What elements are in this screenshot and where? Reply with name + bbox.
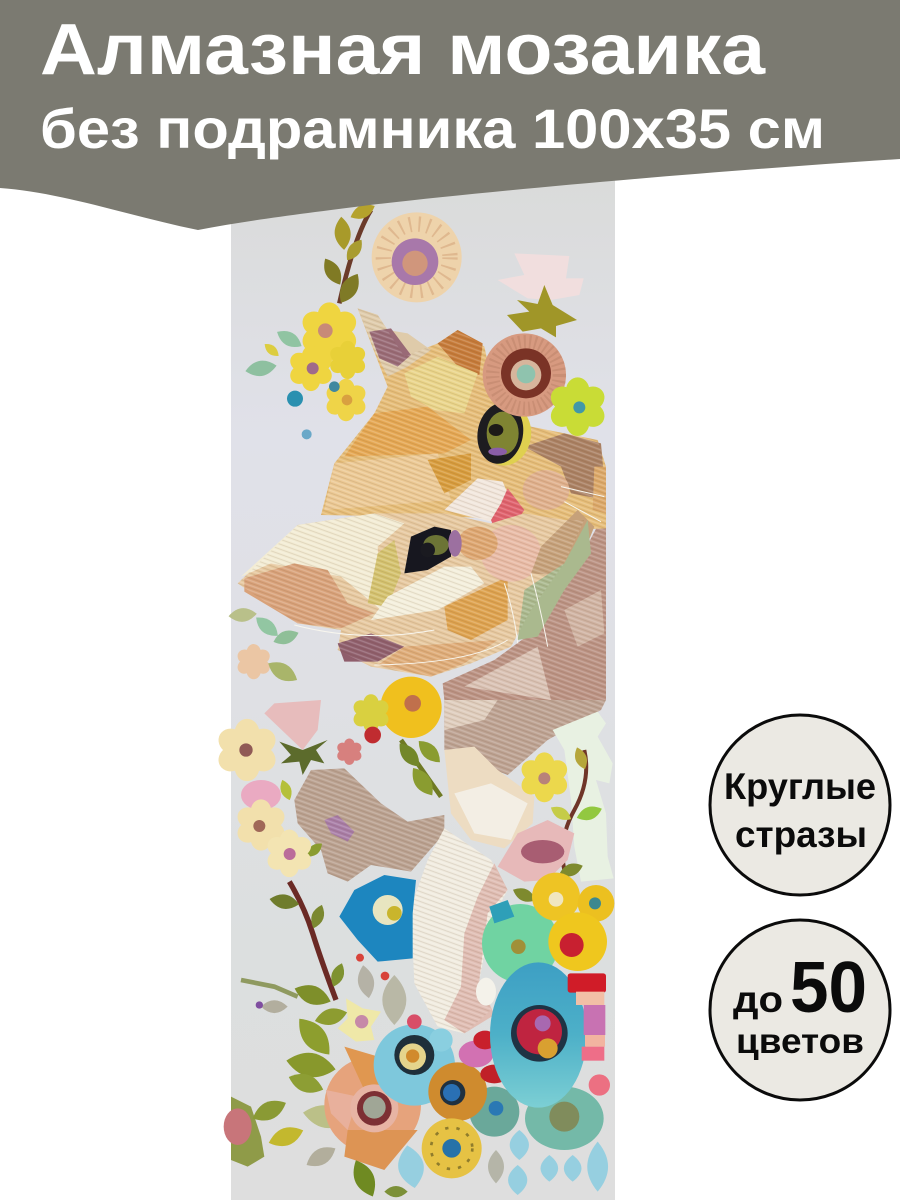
yellow flower cluster [244, 302, 369, 439]
badge: round rhinestones: Круглые [724, 766, 876, 807]
bottom-left flower and leaves [224, 1095, 351, 1172]
dark stem with leaves [241, 882, 348, 1013]
cream upper ear [241, 513, 404, 610]
green side leaves [228, 607, 301, 687]
chest fur [444, 747, 534, 848]
tan fold [531, 510, 594, 577]
lower eye [404, 527, 462, 573]
badge: up to 50 colours: 50 [790, 948, 867, 1028]
olive leaf branch [394, 736, 445, 800]
cat body fur [443, 510, 606, 700]
whiskers [294, 487, 604, 665]
green flower [482, 900, 559, 983]
title line 2: без подрамника 100х35 см [40, 97, 825, 160]
green leaves and stem at right [548, 745, 604, 870]
white side flowers [553, 712, 614, 882]
embroidered cat picture [214, 180, 615, 1200]
badge: round rhinestones [710, 715, 890, 895]
white muzzle [444, 478, 508, 522]
yellow forehead [404, 357, 478, 413]
yellow flower on head [546, 377, 609, 436]
yellow-green eye surround [368, 540, 401, 607]
yellow flower top [351, 677, 442, 743]
olive leaves cluster [284, 1005, 349, 1098]
brown pansy [483, 333, 566, 417]
orange-pink large flower [324, 1047, 421, 1170]
light blue flower [374, 1014, 455, 1106]
brown right side [524, 433, 606, 500]
orange crown patch [438, 330, 483, 375]
right cheek [523, 470, 569, 510]
title line 1: Алмазная мозаика [40, 10, 766, 90]
teal star flower [525, 1087, 604, 1150]
yellow bottom flower [422, 1118, 482, 1178]
badge: round rhinestones: стразы [735, 814, 867, 855]
lower picture: legs, paws and flowers [214, 677, 614, 1200]
white front leg [411, 828, 508, 1033]
purple chin shadow [338, 633, 404, 662]
brown paw [294, 768, 444, 882]
ear interior [358, 308, 431, 377]
top-left cream flower and pink tulip [214, 700, 363, 781]
tan lower band [324, 453, 451, 510]
badge: up to 50 colours: до [733, 979, 783, 1020]
badge: up to 50 colours [710, 920, 890, 1100]
teal small flower [469, 1087, 519, 1137]
branch with leaves [319, 200, 377, 307]
small yellow flower [518, 752, 571, 802]
orange ear interior [244, 563, 374, 628]
blue flower [339, 875, 416, 962]
gold lower cheek [444, 577, 508, 640]
nose [491, 488, 524, 528]
peach round flower [372, 212, 462, 302]
upper eye [473, 399, 536, 470]
green bands [518, 520, 591, 640]
picture canvas [231, 180, 615, 1200]
big blue flower [490, 962, 587, 1108]
orange cheek band [344, 407, 471, 457]
pale yellow star [338, 998, 381, 1042]
lavender sprigs [355, 954, 406, 1025]
body fur lower part [444, 700, 606, 775]
header banner [0, 0, 900, 230]
right column colored stripes [568, 973, 610, 1096]
upper picture: cat head and flowers [228, 200, 609, 700]
pink and red side petals [459, 1031, 508, 1083]
badge: up to 50 colours: цветов [736, 1022, 864, 1061]
bottom pale blue sprigs [347, 1130, 608, 1200]
left side flowers [234, 778, 325, 877]
pink raised paw [498, 820, 574, 882]
cat lower face [238, 510, 594, 677]
small white petals [476, 978, 496, 1006]
gold under eye [428, 453, 471, 493]
orange flower [428, 1062, 487, 1121]
pink muzzle [481, 525, 541, 582]
yellow flowers right [510, 860, 614, 971]
pink-white top flower with olive star [498, 253, 584, 337]
cat upper head [321, 308, 606, 530]
banner shape [0, 0, 900, 230]
cream cheek [371, 567, 484, 620]
